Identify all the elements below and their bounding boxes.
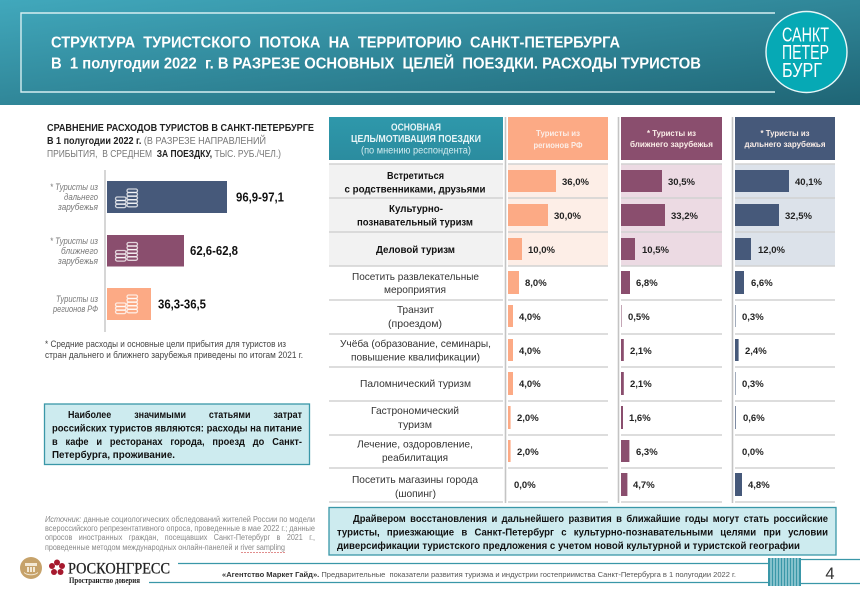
row labels: trip purposes: повышение квалификации) bbox=[351, 352, 480, 364]
bars: tourists from far abroad: 6,6% bbox=[751, 278, 773, 289]
table header: main purpose: (по мнению респондента) bbox=[361, 146, 471, 156]
row labels: trip purposes: познавательный туризм bbox=[357, 216, 473, 228]
bar: Russian regions tourists bbox=[52, 288, 206, 320]
logo: Roscongress bbox=[20, 557, 170, 585]
row labels: trip purposes: с родственниками, друзьями bbox=[344, 184, 486, 196]
icon: Saint Petersburg logo: САНКТ bbox=[782, 24, 829, 46]
bars: tourists from Russian regions: 2,0% bbox=[517, 413, 539, 424]
table header: main purpose: ЦЕЛЬ/МОТИВАЦИЯ ПОЕЗДКИ bbox=[351, 134, 481, 145]
bar: far abroad tourists: дальнего bbox=[64, 192, 98, 202]
callout: growth driver: туристы, приезжающие в Санкт-Петербург с культурно-познавательными целями при условии bbox=[337, 526, 828, 538]
table header: far abroad bbox=[735, 117, 835, 160]
bar: Russian regions tourists: регионов РФ bbox=[52, 304, 98, 314]
table header: main purpose bbox=[329, 117, 503, 160]
bars: tourists from near abroad: 10,5% bbox=[642, 245, 669, 256]
icon: red flower bbox=[49, 560, 65, 575]
table header: near abroad: ближнего зарубежья bbox=[630, 139, 713, 149]
source note: опросов иностранных граждан, посещавших Санкт-Петербург в 2021 г., bbox=[45, 533, 315, 542]
bar: near abroad tourists bbox=[50, 235, 238, 266]
row labels: trip purposes: Посетить магазины города bbox=[352, 474, 478, 486]
row labels: trip purposes: реабилитация bbox=[382, 452, 448, 464]
bars: tourists from far abroad: 0,6% bbox=[743, 413, 765, 424]
header banner bbox=[0, 0, 860, 105]
callout: growth driver: диверсификации туристского предложения с учетом новой культурной и туристской географии bbox=[337, 540, 800, 552]
bars: tourists from Russian regions: 10,0% bbox=[528, 245, 555, 256]
page number: 4 bbox=[825, 565, 835, 583]
row labels: trip purposes: (шопинг) bbox=[395, 488, 436, 500]
source note: всероссийского репрезентативного опроса, проведенные в мае 2022 г.; данные bbox=[45, 524, 316, 533]
callout: main spending items bbox=[44, 404, 310, 464]
heading: spending comparison: СРАВНЕНИЕ РАСХОДОВ ТУРИСТОВ В САНКТ-ПЕТЕРБУРГЕ bbox=[47, 122, 314, 134]
table header: Russian regions: Туристы из bbox=[536, 128, 580, 138]
bars: tourists from Russian regions: 4,0% bbox=[519, 346, 541, 357]
bar: Russian regions tourists: 36,3-36,5 bbox=[158, 298, 206, 312]
source note: Источник: данные социологических обследований жителей России по модели bbox=[45, 515, 315, 524]
bars: tourists from near abroad: 2,1% bbox=[630, 346, 652, 357]
row labels: trip purposes: Транзит bbox=[397, 304, 434, 316]
bars: tourists from far abroad: 32,5% bbox=[785, 211, 812, 222]
bars: tourists from Russian regions: 36,0% bbox=[562, 177, 589, 188]
table header: near abroad bbox=[621, 117, 722, 160]
bars: tourists from near abroad bbox=[621, 170, 698, 496]
callout: main spending items: российских туристов являются: расходы на питание bbox=[52, 422, 302, 434]
bar: near abroad tourists: ближнего bbox=[61, 246, 98, 256]
icon: gold emblem bbox=[20, 557, 42, 579]
bars: tourists from far abroad: 2,4% bbox=[745, 346, 767, 357]
bars: tourists from far abroad: 0,3% bbox=[742, 379, 764, 390]
row labels: trip purposes: мероприятия bbox=[384, 284, 446, 296]
row labels: trip purposes: Лечение, оздоровление, bbox=[357, 438, 473, 450]
table row tints bbox=[329, 164, 835, 266]
icon: Saint Petersburg logo: БУРГ bbox=[782, 60, 822, 82]
icon: Saint Petersburg logo bbox=[766, 12, 847, 92]
bar: far abroad tourists: зарубежья bbox=[57, 202, 98, 212]
bar: Russian regions tourists: Туристы из bbox=[56, 294, 98, 304]
table header: near abroad: * Туристы из bbox=[647, 128, 696, 138]
table header: main purpose: ОСНОВНАЯ bbox=[391, 122, 441, 134]
callout: growth driver bbox=[329, 508, 836, 555]
striped block bbox=[768, 558, 801, 586]
row labels: trip purposes: Встретиться bbox=[387, 170, 444, 182]
row labels: trip purposes: туризм bbox=[398, 419, 432, 431]
callout: main spending items: Наиболее значимыми статьями затрат bbox=[68, 409, 302, 421]
row labels: trip purposes: Учёба (образование, семинары, bbox=[340, 338, 491, 350]
heading: spending comparison: В 1 полугодии 2022 г. (В РАЗРЕЗЕ НАПРАВЛЕНИЙ bbox=[47, 134, 266, 147]
callout: main spending items: Петербурга, проживание. bbox=[52, 449, 175, 461]
heading: spending comparison: ПРИБЫТИЯ, В СРЕДНЕМ ЗА ПОЕЗДКУ, ТЫС. РУБ./ЧЕЛ.) bbox=[47, 149, 281, 160]
table header: Russian regions: регионов РФ bbox=[534, 140, 582, 150]
bars: tourists from near abroad: 6,8% bbox=[636, 278, 658, 289]
bars: tourists from Russian regions: 4,0% bbox=[519, 379, 541, 390]
bars: tourists from far abroad bbox=[735, 170, 822, 496]
bars: tourists from near abroad: 30,5% bbox=[668, 177, 695, 188]
title: СТРУКТУРА ТУРИСТСКОГО ПОТОКА НА ТЕРРИТОРИЮ САНКТ-ПЕТЕРБУРГА bbox=[51, 34, 620, 52]
bars: tourists from near abroad: 2,1% bbox=[630, 379, 652, 390]
row labels: trip purposes bbox=[340, 170, 491, 500]
bars: tourists from Russian regions: 2,0% bbox=[517, 447, 539, 458]
row labels: trip purposes: Посетить развлекательные bbox=[352, 271, 479, 283]
source note bbox=[45, 515, 316, 552]
footer bar bbox=[149, 558, 860, 586]
table header: far abroad: дальнего зарубежья bbox=[744, 139, 826, 149]
icon: Saint Petersburg logo: ПЕТЕР bbox=[782, 42, 829, 64]
bars: tourists from Russian regions: 30,0% bbox=[554, 211, 581, 222]
bar: near abroad tourists: * Туристы из bbox=[50, 236, 98, 246]
bars: tourists from far abroad: 4,8% bbox=[748, 480, 770, 491]
footnote: * Средние расходы и основные цели прибытия для туристов из bbox=[45, 339, 286, 349]
footnote bbox=[45, 339, 303, 360]
callout: main spending items: в кафе и ресторанах города, проезд до Санкт- bbox=[52, 436, 302, 448]
bars: tourists from far abroad: 40,1% bbox=[795, 177, 822, 188]
title: В 1 полугодии 2022 г. В РАЗРЕЗЕ ОСНОВНЫХ ЦЕЛЕЙ ПОЕЗДКИ. РАСХОДЫ ТУРИСТОВ bbox=[51, 54, 701, 72]
row labels: trip purposes: Гастрономический bbox=[371, 405, 459, 417]
bars: tourists from near abroad: 4,7% bbox=[633, 480, 655, 491]
row labels: trip purposes: Деловой туризм bbox=[376, 244, 455, 256]
bars: tourists from Russian regions: 8,0% bbox=[525, 278, 547, 289]
bars: tourists from Russian regions: 4,0% bbox=[519, 312, 541, 323]
bars: tourists from far abroad: 12,0% bbox=[758, 245, 785, 256]
bars: tourists from Russian regions bbox=[508, 170, 589, 491]
bar chart: spending per trip bbox=[50, 170, 284, 332]
bar: far abroad tourists bbox=[50, 181, 284, 213]
heading: spending comparison bbox=[47, 122, 314, 160]
logo: Roscongress: Пространство доверия bbox=[69, 576, 141, 585]
bars: tourists from far abroad: 0,0% bbox=[742, 447, 764, 458]
footer text: «Агентство Маркет Гайд». Предварительные показатели развития туризма и индустрии гостеприимства Санкт-Петербурга в 1 полугодии 2022 г. bbox=[222, 570, 736, 579]
row labels: trip purposes: Паломнический туризм bbox=[360, 378, 471, 390]
bars: tourists from near abroad: 1,6% bbox=[629, 413, 651, 424]
footnote: стран дальнего и ближнего зарубежья приведены по итогам 2021 г. bbox=[45, 350, 303, 360]
bars: tourists from near abroad: 33,2% bbox=[671, 211, 698, 222]
source note: проведенные методом международных онлайн-панелей и river sampling bbox=[45, 543, 285, 552]
table header: far abroad: * Туристы из bbox=[760, 128, 810, 138]
bars: tourists from near abroad: 6,3% bbox=[636, 447, 658, 458]
bars: tourists from Russian regions: 0,0% bbox=[514, 480, 536, 491]
bar: far abroad tourists: 96,9-97,1 bbox=[236, 190, 284, 204]
bar: near abroad tourists: 62,6-62,8 bbox=[190, 244, 238, 258]
logo: Roscongress: РОСКОНГРЕСС bbox=[68, 560, 170, 578]
bars: tourists from far abroad: 0,3% bbox=[742, 312, 764, 323]
title bbox=[51, 34, 701, 72]
table header: Russian regions bbox=[508, 117, 608, 160]
row labels: trip purposes: (проездом) bbox=[388, 318, 442, 330]
bar: near abroad tourists: зарубежья bbox=[57, 256, 98, 266]
row labels: trip purposes: Культурно- bbox=[389, 203, 443, 215]
bar: far abroad tourists: * Туристы из bbox=[50, 182, 98, 192]
bars: tourists from near abroad: 0,5% bbox=[628, 312, 650, 323]
